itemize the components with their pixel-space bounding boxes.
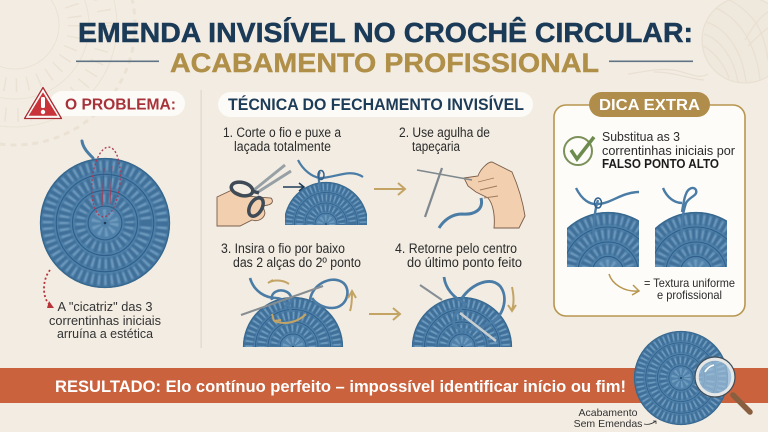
heading: dica extra: DICA EXTRA — [599, 97, 700, 114]
step 2 text: tapeçaria — [412, 139, 460, 154]
crochet disc with scar — [40, 158, 170, 288]
step 3 text: 3. Insira o fio por baixo — [221, 241, 345, 256]
scar highlight — [89, 146, 123, 218]
step 1 illustration: crochet edge — [285, 160, 367, 225]
tip illustration: after — [655, 186, 727, 267]
icon: warning triangle — [24, 88, 62, 118]
step 3 text — [221, 241, 361, 270]
yarn tail — [82, 141, 93, 158]
icon: check — [564, 137, 594, 165]
problem caption — [49, 299, 161, 341]
problem caption: A "cicatriz" das 3 — [58, 299, 152, 314]
step 1 text: 1. Corte o fio e puxe a — [223, 125, 341, 140]
arrow: result — [609, 274, 639, 295]
step 4 text — [395, 241, 522, 270]
step 2 illustration: hand and needle — [417, 162, 525, 228]
problem caption: correntinhas iniciais — [49, 313, 161, 328]
step 1 text — [223, 125, 341, 154]
tip illustration: before — [567, 188, 639, 267]
heading: técnica: TÉCNICA DO FECHAMENTO INVISÍVEL — [228, 95, 524, 114]
panel: dica extra — [553, 92, 746, 317]
subtitle: ACABAMENTO PROFISSIONAL — [170, 48, 599, 78]
panel: o problema — [24, 88, 185, 341]
gold arrow 3 to 4 — [369, 308, 400, 320]
small arrow — [644, 421, 656, 424]
tip text — [602, 129, 736, 171]
step 4 text: do último ponto feito — [407, 255, 522, 270]
tip text: Substitua as 3 — [602, 129, 680, 144]
icon: magnifying glass — [694, 356, 753, 415]
heading: o problema — [50, 91, 185, 116]
step 3 illustration — [240, 278, 357, 347]
background doily decoration — [0, 0, 135, 145]
result text — [644, 276, 735, 302]
finished label — [574, 407, 642, 430]
title — [78, 17, 693, 78]
result banner — [0, 368, 768, 403]
background yarn ball decoration — [628, 0, 768, 83]
finished label: Acabamento — [579, 407, 638, 419]
step 1 illustration: hand and scissors — [217, 165, 291, 226]
panel: técnica — [216, 92, 533, 347]
step 3 text: das 2 alças do 2º ponto — [233, 255, 361, 270]
step 4 text: 4. Retorne pelo centro — [395, 241, 517, 256]
finished label: Sem Emendas — [574, 418, 642, 430]
step 4 illustration — [412, 276, 517, 347]
step 1 text: laçada totalmente — [234, 139, 331, 154]
tip text: correntinhas iniciais por — [602, 143, 736, 158]
gold arrow 1 to 2 — [374, 183, 405, 195]
step 2 text: 2. Use agulha de — [399, 125, 490, 140]
title: EMENDA INVISÍVEL NO CROCHÊ CIRCULAR: — [78, 17, 693, 48]
result banner: RESULTADO: Elo contínuo perfeito – impossível identificar início ou fim! — [55, 377, 626, 396]
result text: = Textura uniforme — [644, 276, 735, 290]
arrow: scissors to yarn — [283, 183, 304, 191]
result text: e profissional — [657, 288, 722, 302]
heading: dica extra — [589, 92, 710, 117]
problem caption: arruína a estética — [57, 326, 154, 341]
step 2 text — [399, 125, 490, 154]
tip text: FALSO PONTO ALTO — [602, 156, 719, 171]
finished disc — [634, 331, 728, 425]
dotted arrow — [44, 270, 54, 308]
heading: o problema: O PROBLEMA: — [65, 96, 176, 114]
